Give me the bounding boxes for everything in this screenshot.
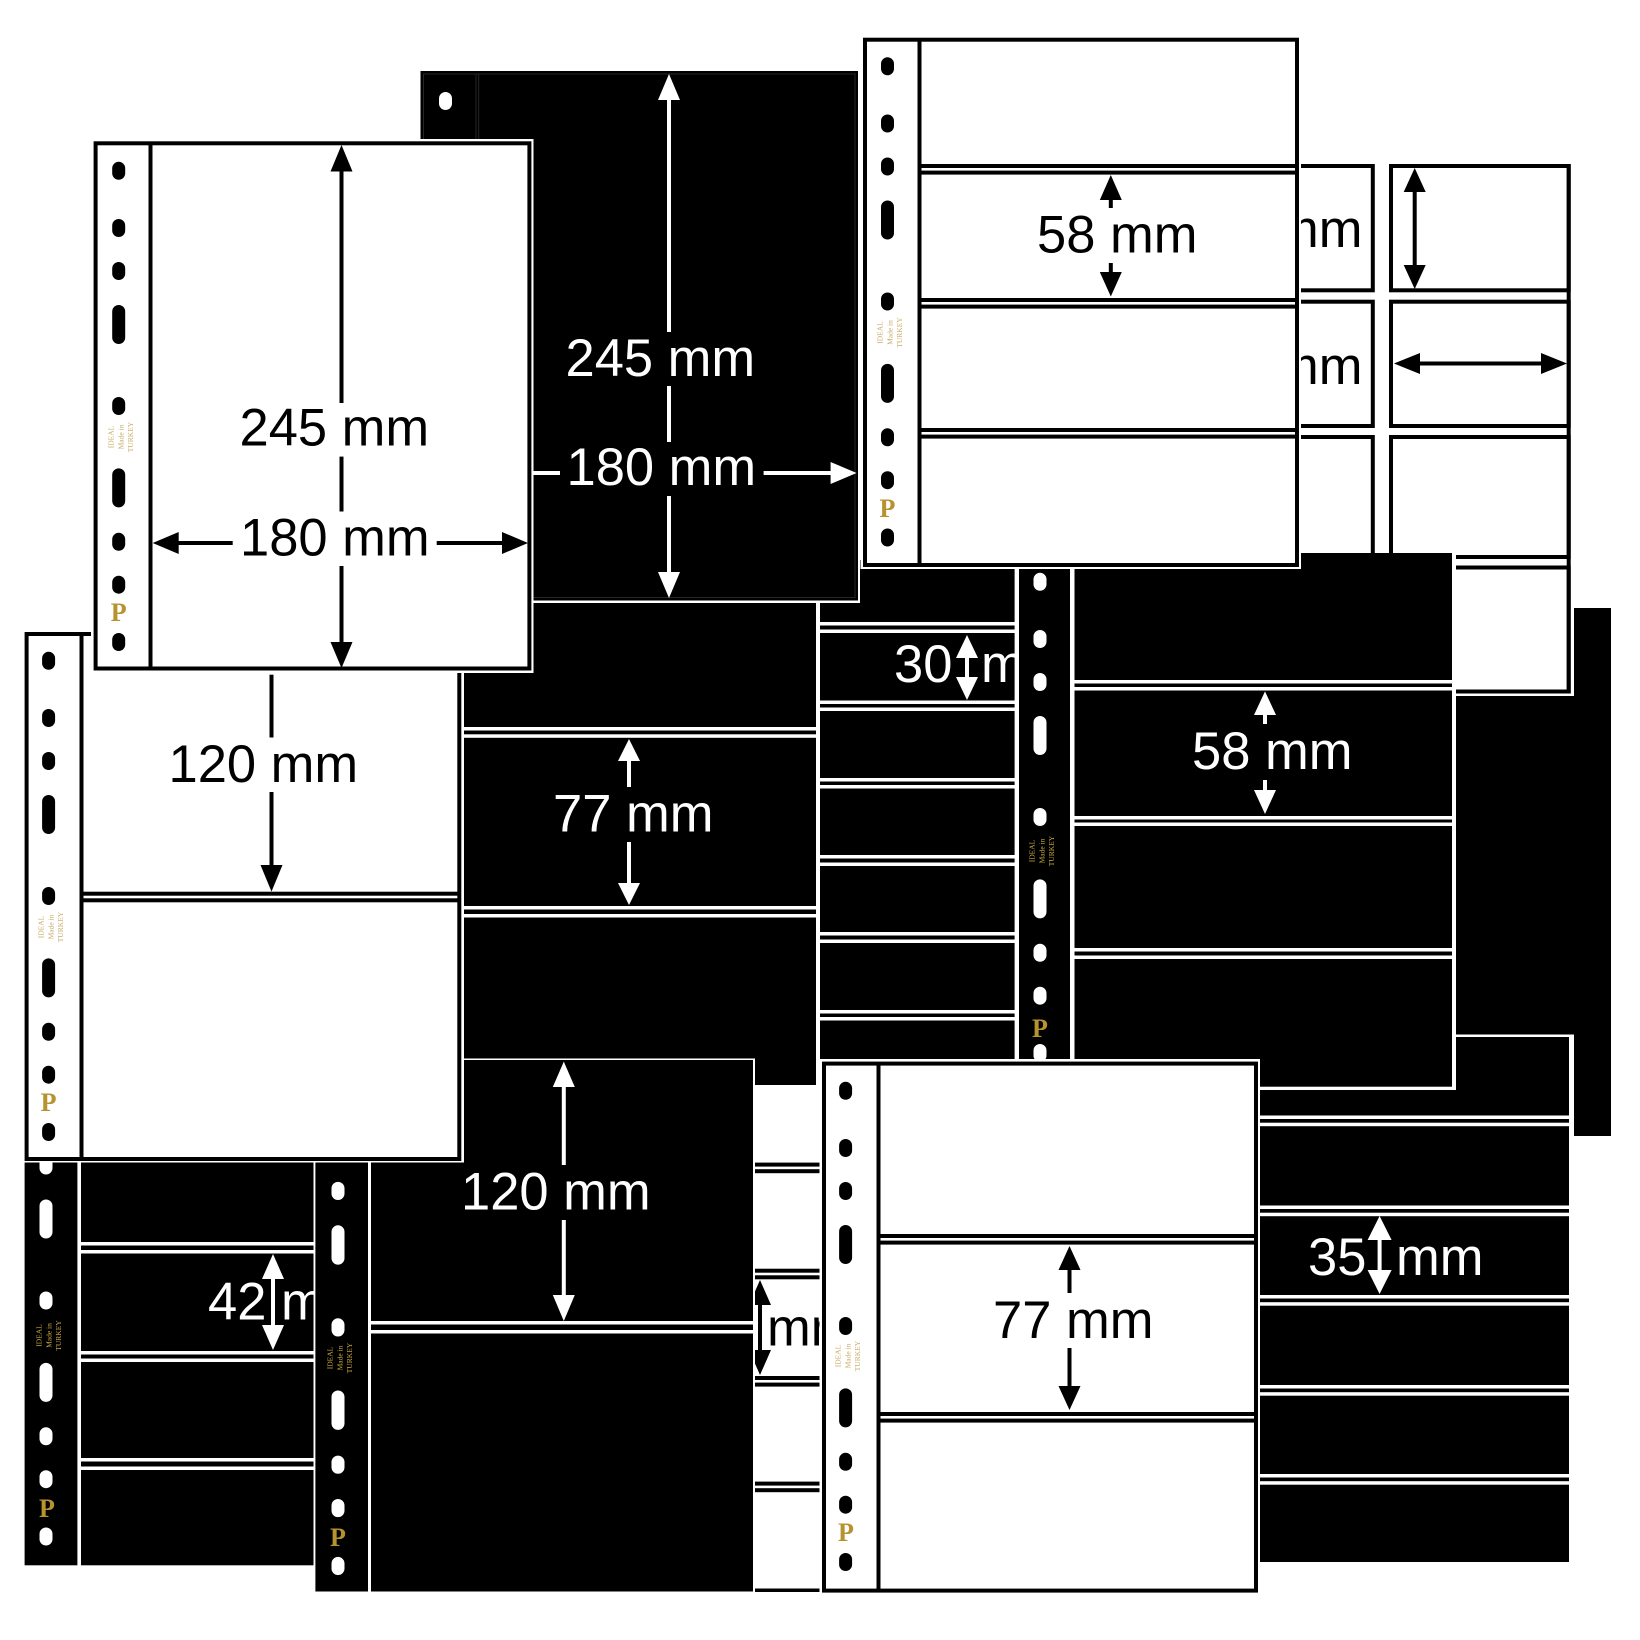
imprint: IDEAL Made in TURKEY [326,1342,354,1373]
imprint: IDEAL Made in TURKEY: TURKEY [895,317,904,348]
icon: binder holes [112,162,125,651]
arrow: 120 mm [553,1062,575,1321]
imprint: IDEAL Made in TURKEY: TURKEY [56,911,65,942]
panel: black 35 mm sheet [1130,1034,1574,1564]
panel: white four-column grid sheet [1200,162,1574,696]
imprint: IDEAL Made in TURKEY [36,911,65,942]
imprint: IDEAL Made in TURKEY [34,1320,63,1351]
icon: binder holes [42,652,55,1141]
logo: P: P [880,494,896,523]
icon: punch hole [439,92,452,110]
imprint: IDEAL Made in TURKEY: Made in [886,320,894,345]
imprint: IDEAL Made in TURKEY: Made in [1038,838,1046,863]
label: 58 mm: 58 mm [1192,722,1352,781]
imprint: IDEAL Made in TURKEY: TURKEY [126,421,135,452]
imprint: IDEAL Made in TURKEY: IDEAL [1028,839,1036,862]
imprint: IDEAL Made in TURKEY: TURKEY [1047,835,1056,866]
imprint: IDEAL Made in TURKEY: Made in [44,1323,54,1348]
imprint: IDEAL Made in TURKEY [834,1340,862,1371]
label: grid height mm: mm [1275,200,1362,259]
icon: binder holes [332,1081,344,1575]
logo: P: P [838,1518,854,1547]
label: 120 mm: 120 mm [168,735,358,794]
imprint: IDEAL Made in TURKEY: Made in [844,1343,852,1368]
arrow: grid width [1394,353,1567,374]
arrow: white 42 mm [749,1280,771,1375]
label: 245 mm: 245 mm [240,398,429,458]
arrow: 120 mm [260,675,282,892]
imprint: IDEAL Made in TURKEY: IDEAL [106,425,116,448]
imprint: IDEAL Made in TURKEY: TURKEY [54,1320,63,1351]
label: 180 mm: 180 mm [566,438,756,497]
imprint: IDEAL Made in TURKEY: Made in [46,914,56,939]
label: 77 mm: 77 mm [553,784,713,844]
label: 35 mm: 35 mm [1308,1228,1483,1287]
panel: black 245 by 180 mm sheet [420,71,860,603]
imprint: IDEAL Made in TURKEY: Made in [116,424,126,449]
logo: P: P [330,1523,346,1552]
logo: P: P [41,1088,57,1117]
arrow: 245 mm [658,74,680,598]
arrow: 30 mm [956,635,978,700]
label: grid width mm: mm [1275,337,1362,396]
panel: black 30 mm sheet [800,560,1068,1070]
panel: white 77 mm sheet [820,1059,1260,1595]
arrow: grid height [1404,168,1426,289]
arrow: 77 mm [618,739,640,905]
panel: white 58 mm sheet [860,35,1301,569]
panel: white 120 mm sheet [22,630,464,1162]
panel: far right black sheet [1400,608,1611,1136]
logo: P: P [1032,1014,1048,1043]
imprint: IDEAL Made in TURKEY: IDEAL [34,1324,44,1347]
icon: binder holes [1034,573,1046,1062]
icon: binder holes [839,1082,852,1571]
arrow: 58 mm [1100,175,1122,296]
arrow: 245 mm [330,145,352,668]
arrow: 180 mm [153,532,528,554]
label: 180 mm: 180 mm [240,508,430,568]
imprint: IDEAL Made in TURKEY: TURKEY [853,1340,862,1371]
panel: black 58 mm sheet [1015,553,1456,1090]
imprint: IDEAL Made in TURKEY: IDEAL [876,321,884,344]
arrow: 58 mm [1254,691,1276,814]
panel: black 77 mm sheet [376,557,820,1086]
imprint: IDEAL Made in TURKEY: Made in [336,1345,344,1370]
imprint: IDEAL Made in TURKEY: IDEAL [834,1344,842,1367]
panel: white 245 by 180 mm sheet [91,139,534,673]
icon: binder holes [881,57,894,547]
label: 42 mm: 42 mm [208,1272,368,1332]
imprint: IDEAL Made in TURKEY: IDEAL [36,915,46,938]
label: 77 mm: 77 mm [993,1291,1153,1350]
imprint: IDEAL Made in TURKEY [876,317,904,348]
icon: binder holes [40,1056,52,1546]
panel: white 42 mm sheet [694,1100,854,1592]
imprint: IDEAL Made in TURKEY [106,421,135,452]
label: 245 mm: 245 mm [566,329,755,388]
arrow: 35 mm [1368,1216,1392,1294]
logo: P: P [39,1494,55,1523]
label: 30 mm: 30 mm [894,635,1068,694]
imprint: IDEAL Made in TURKEY [1028,835,1056,866]
label: hidden mm: 42 mm [694,1299,854,1358]
panel: black 42 mm sheet [25,1056,368,1566]
imprint: IDEAL Made in TURKEY: IDEAL [326,1346,334,1369]
label: 58 mm: 58 mm [1037,206,1197,264]
imprint: IDEAL Made in TURKEY: TURKEY [345,1342,354,1373]
arrow: 42 mm [262,1254,284,1350]
label: 120 mm: 120 mm [461,1163,651,1222]
arrow: 77 mm [1058,1246,1080,1410]
panel: black 120 mm sheet [314,1058,755,1592]
arrow: 180 mm [533,462,857,484]
logo: P: P [111,598,127,627]
